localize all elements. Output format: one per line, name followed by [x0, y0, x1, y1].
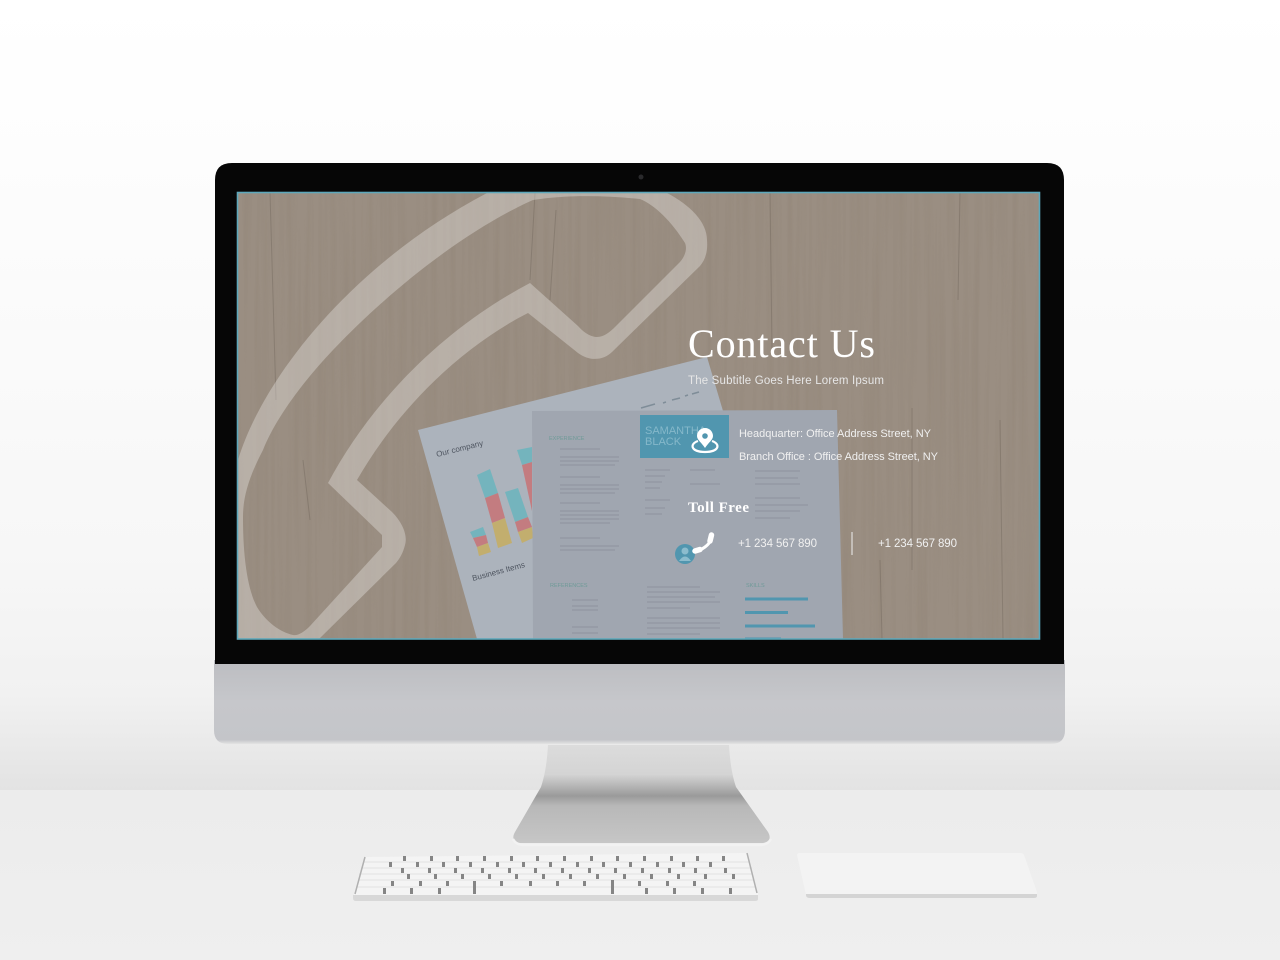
front resume paper	[532, 410, 843, 639]
phone number two: +1 234 567 890	[878, 538, 957, 550]
keyboard key gaps	[383, 856, 735, 894]
resume text lines	[560, 449, 808, 634]
resume name banner: BLACK	[645, 436, 682, 448]
lower chart heading: Business Items	[471, 560, 526, 583]
monitor chin	[214, 660, 1065, 744]
stacked bar chart	[470, 447, 533, 556]
toll free heading: Toll Free	[688, 500, 749, 516]
screen border	[238, 192, 1040, 639]
address: headquarter: Headquarter: Office Address Street, NY	[739, 428, 932, 440]
monitor bezel	[215, 163, 1064, 664]
chart heading: Our company	[435, 439, 484, 459]
webcam	[638, 174, 644, 180]
icon: location pin	[693, 428, 717, 452]
wood background	[238, 193, 1040, 639]
front resume paper: SKILLS	[746, 583, 765, 589]
title: Contact Us	[688, 321, 875, 366]
icon: telephone handset	[695, 535, 712, 551]
avatar badge	[675, 544, 695, 564]
monitor stand	[513, 745, 771, 845]
resume name banner: SAMANTHA	[645, 425, 707, 437]
divider between numbers	[852, 532, 853, 555]
subtitle: The Subtitle Goes Here Lorem Ipsum	[688, 375, 884, 387]
keyboard	[353, 853, 758, 901]
large phone outline watermark	[238, 193, 707, 640]
address: branch office: Branch Office : Office Address Street, NY	[739, 451, 939, 463]
screen slide	[238, 193, 1040, 640]
resume name banner	[640, 415, 729, 458]
resume section headings: EXPERIENCE	[549, 436, 585, 442]
trackpad	[797, 853, 1037, 898]
back paper	[418, 357, 745, 639]
front resume paper: REFERENCES	[550, 583, 588, 589]
desk surface	[0, 790, 1280, 960]
skill bars	[745, 599, 815, 639]
phone number one: +1 234 567 890	[738, 538, 817, 550]
legend dots	[641, 392, 699, 408]
